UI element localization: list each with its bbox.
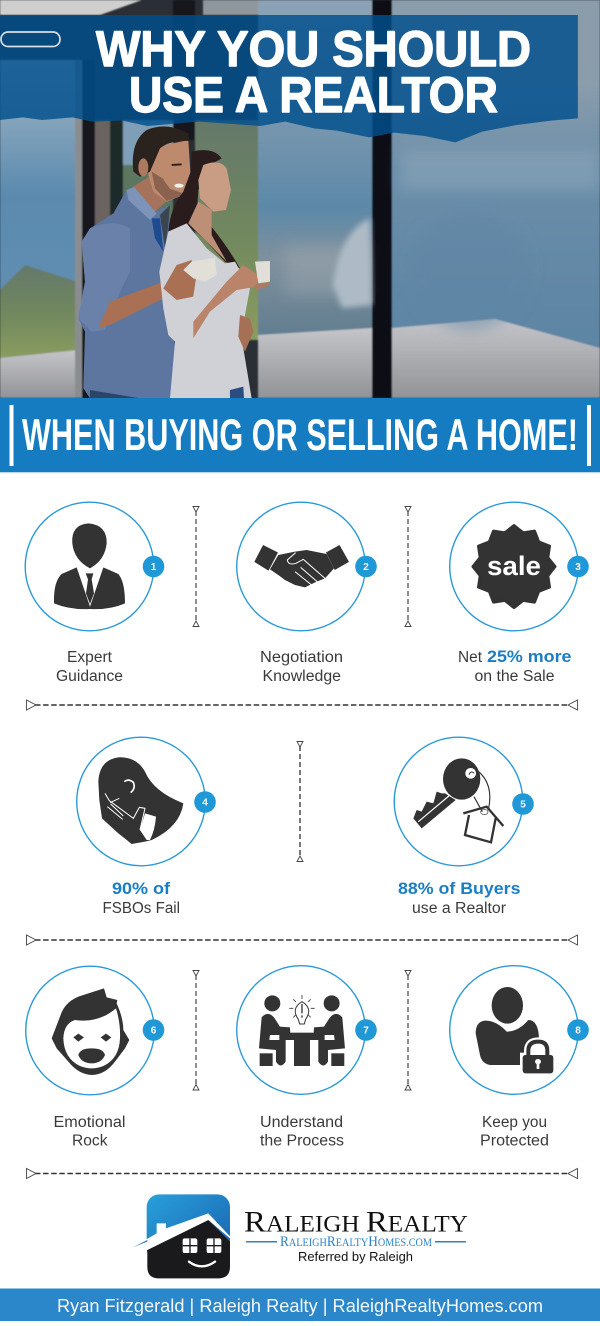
item 6: emotional rock: Rock [72,1132,108,1150]
item 3: net 25% more [450,502,589,685]
item 2: negotiation knowledge: Negotiation [260,649,343,666]
item 1: expert guidance: 1 [151,562,157,573]
item 8: keep you protected: 8 [575,1026,581,1036]
man and woman [78,127,270,398]
divider 2-3 [405,506,411,626]
paperclip mark [1,32,60,46]
torn title banner [0,15,578,142]
item 4: 90% of FSBOs fail: 90% of [112,879,170,898]
icon: person facepalm [98,757,183,844]
logo wordmark: RALEIGH REALTY [244,1206,468,1238]
item 7: understand the process: Understand [260,1114,343,1131]
logo: raleigh realty [133,1194,468,1278]
item 6: emotional rock: Emotional [54,1114,126,1131]
item 5: 88% of buyers: 88% of Buyers [398,879,520,898]
item 7: understand the process [237,966,377,1150]
row divider 3 [26,1168,578,1178]
item 4: 90% of FSBOs fail: 4 [202,798,208,808]
item 7: understand the process: the Process [260,1132,344,1150]
icon: handshake [255,546,348,587]
item 2: negotiation knowledge: Knowledge [262,668,341,685]
divider 4-5 [297,742,303,862]
item 4: 90% of FSBOs fail [77,737,216,917]
logo wordmark [244,1206,468,1264]
title: WHY YOU SHOULD [96,21,531,77]
icon: key with house tag [413,758,503,842]
title [96,21,531,123]
item 8: keep you protected [450,966,589,1150]
icon: person with padlock [476,987,556,1076]
footer bar [0,1288,600,1321]
item 6: emotional rock: 6 [151,1026,157,1036]
divider 1-2 [193,506,199,626]
item 7: understand the process: 7 [363,1026,369,1036]
icon: sale badge [473,526,555,608]
item 1: expert guidance: Expert [67,649,113,666]
item 1: expert guidance [25,502,164,685]
hero photo: couple at window [0,0,600,398]
item 8: keep you protected: Keep you [482,1114,547,1131]
item 3: net 25% more: Net [458,649,483,666]
item 5: 88% of buyers [394,737,534,917]
footer bar: Ryan Fitzgerald | Raleigh Realty | RaleighRealtyHomes.com [57,1296,543,1316]
logo house icon [133,1194,237,1278]
item 8: keep you protected: Protected [480,1132,549,1150]
item 5: 88% of buyers: 5 [520,800,526,810]
item 2: negotiation knowledge [237,502,377,685]
row divider 1 [26,700,578,710]
divider 6-7 [193,970,199,1090]
logo wordmark: Referred by Raleigh [298,1250,413,1264]
icon: sale badge: sale [487,551,541,581]
item 2: negotiation knowledge: 2 [363,562,369,573]
icon: businessman [54,523,125,609]
reflection of the couple [333,218,372,308]
row divider 2 [26,935,578,945]
item 3: net 25% more: 3 [575,562,581,573]
logo wordmark: RALEIGHREALTYHOMES.COM [280,1234,432,1250]
man [78,127,197,398]
subtitle banner [0,398,600,473]
item 3: net 25% more: 25% more [487,647,572,666]
item 6: emotional rock [26,966,164,1150]
icon: smiling face [52,988,129,1075]
woman [159,150,270,398]
divider 7-8 [405,970,411,1090]
item 4: 90% of FSBOs fail: FSBOs Fail [102,900,180,917]
item 3: net 25% more: on the Sale [474,668,554,685]
icon: meeting with light bulb [259,995,345,1066]
item 1: expert guidance: Guidance [56,668,123,685]
item 5: 88% of buyers: use a Realtor [412,900,506,917]
title: USE A REALTOR [129,67,498,123]
